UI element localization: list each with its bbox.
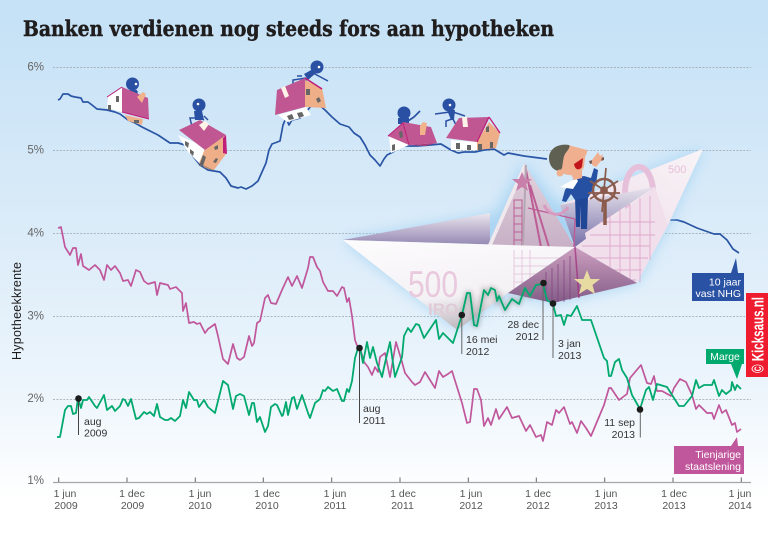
- y axis gridlines: [53, 68, 751, 400]
- x axis labels: [54, 488, 752, 512]
- y axis labels: 1%: [27, 475, 44, 487]
- callout: 10 jaar vast NHG: vast NHG: [695, 288, 741, 300]
- house body: [305, 80, 326, 108]
- icon: house 2 with figure: [178, 98, 227, 170]
- annotation: 16 mei 2012: 16 mei: [466, 334, 498, 346]
- neck: [570, 168, 582, 180]
- y axis labels: [27, 62, 44, 487]
- annotation: 28 dec 2012: [507, 280, 547, 343]
- credit tab: [746, 293, 768, 377]
- ship wheel: [588, 168, 620, 225]
- head: [553, 145, 587, 175]
- x axis labels: 1 dec: [254, 488, 280, 500]
- x axis labels: 2010: [188, 500, 212, 512]
- x axis labels: 2009: [121, 500, 144, 512]
- line halo over boat: [462, 284, 543, 326]
- callout: Tienjarige staatslening: Tienjarige: [695, 449, 741, 461]
- euro: IRO: [428, 300, 458, 319]
- bottom center panel: [508, 247, 637, 303]
- callout: Marge: [706, 349, 744, 379]
- icon: house 5 with figure: [435, 98, 500, 150]
- line: marge: [57, 284, 741, 437]
- x axis labels: 1 jun: [595, 488, 618, 500]
- x axis labels: 1 dec: [390, 488, 416, 500]
- x axis labels: 2012: [459, 500, 483, 512]
- x axis labels: 1 jun: [729, 488, 752, 500]
- icon: house 1 with figure: [107, 78, 149, 125]
- back left sail: [343, 213, 575, 247]
- bottom panel details: [546, 247, 579, 302]
- y axis labels: 4%: [27, 228, 44, 240]
- x axis labels: 1 jun: [54, 488, 77, 500]
- x axis labels: 2011: [391, 500, 414, 512]
- y axis labels: 2%: [27, 393, 44, 405]
- hair: [549, 145, 570, 171]
- annotation: 3 jan 2013: [550, 300, 582, 362]
- annotation: 11 sep 2013: [604, 406, 643, 441]
- callout: Tienjarige staatslening: staatslening: [685, 461, 741, 473]
- house body: [389, 125, 409, 153]
- banknote grid: [578, 196, 655, 284]
- big 500: 500: [408, 264, 458, 305]
- annotation: aug 2009: 2009: [84, 428, 108, 440]
- front right panel: [575, 187, 668, 283]
- annotation: 3 jan 2013: 2013: [558, 350, 582, 362]
- annotation: aug 2009: aug: [84, 416, 102, 428]
- callout: Tienjarige staatslening: [674, 437, 744, 474]
- y axis labels: 5%: [27, 144, 44, 156]
- pink star: [512, 172, 532, 191]
- credit tab: © Kicksaus.nl: [748, 297, 768, 373]
- title: Banken verdienen nog steeds fors aan hypotheken: [23, 16, 554, 41]
- figure: [435, 98, 465, 127]
- illustration: paper boat of a 500 euro note: [343, 145, 703, 330]
- figure: [190, 98, 208, 127]
- house body: [107, 88, 122, 112]
- back right sail: [560, 149, 703, 247]
- x axis labels: 2009: [54, 500, 78, 512]
- helmsman: [549, 145, 620, 229]
- line: tienjarige staatslening: [58, 227, 741, 441]
- scarf: [560, 178, 578, 189]
- torso and arms: [562, 168, 598, 202]
- annotation: 11 sep 2013: 11 sep: [604, 417, 635, 429]
- x axis labels: 1 dec: [661, 488, 687, 500]
- callout: Marge: Marge: [710, 351, 740, 363]
- figure: [293, 60, 328, 84]
- x axis labels: 2013: [594, 500, 618, 512]
- y axis labels: 3%: [27, 310, 44, 322]
- peak left edge: [488, 163, 524, 245]
- callout: 10 jaar vast NHG: [692, 258, 744, 301]
- peak fold: [488, 163, 575, 247]
- front left panel: [343, 240, 575, 330]
- x axis labels: 2012: [526, 500, 550, 512]
- yellow star: [574, 270, 600, 294]
- x axis: [53, 478, 751, 482]
- figure: [398, 106, 420, 124]
- legs: [575, 197, 588, 229]
- y axis title: Hypotheekkrente: [10, 262, 24, 360]
- icon: house 4 with figure: [388, 106, 437, 153]
- house body: [451, 140, 477, 150]
- ear: [556, 170, 564, 176]
- annotation: aug 2011: [356, 345, 386, 427]
- icon: house 3 with figure: [275, 60, 328, 122]
- annotation: aug 2009: [75, 395, 108, 440]
- x axis labels: 2013: [662, 500, 686, 512]
- x axis labels: 1 jun: [460, 488, 483, 500]
- annotation: 3 jan 2013: 3 jan: [558, 338, 581, 350]
- line: 10 jaar vast NHG: [58, 94, 739, 253]
- house body: [178, 135, 205, 164]
- annotation: aug 2011: 2011: [363, 415, 386, 427]
- mouth: [574, 158, 583, 169]
- annotation: 11 sep 2013: 2013: [612, 429, 635, 441]
- x axis labels: 1 jun: [189, 488, 212, 500]
- x axis labels: 2010: [255, 500, 279, 512]
- boat glow: [343, 149, 703, 330]
- x axis labels: 1 dec: [119, 488, 145, 500]
- annotation: 28 dec 2012: 2012: [516, 331, 539, 343]
- annotation: 16 mei 2012: 2012: [466, 346, 490, 358]
- peak banknote details: [514, 165, 575, 248]
- y axis labels: 6%: [27, 62, 44, 74]
- annotation: aug 2011: aug: [363, 403, 381, 415]
- x axis labels: 2014: [728, 500, 752, 512]
- banknote lower grid: [514, 250, 560, 293]
- figure: [126, 78, 139, 101]
- big zero on back sail: [625, 167, 653, 217]
- cigar and hand: [589, 157, 604, 164]
- annotation: 28 dec 2012: 28 dec: [507, 319, 539, 331]
- callout: 10 jaar vast NHG: 10 jaar: [709, 276, 741, 288]
- x axis labels: 2011: [324, 500, 346, 512]
- x axis labels: 1 dec: [525, 488, 551, 500]
- annotation: 16 mei 2012: [458, 312, 498, 358]
- small 500: 500: [668, 164, 686, 176]
- x axis labels: 1 jun: [324, 488, 347, 500]
- inner purple fold: [560, 187, 655, 250]
